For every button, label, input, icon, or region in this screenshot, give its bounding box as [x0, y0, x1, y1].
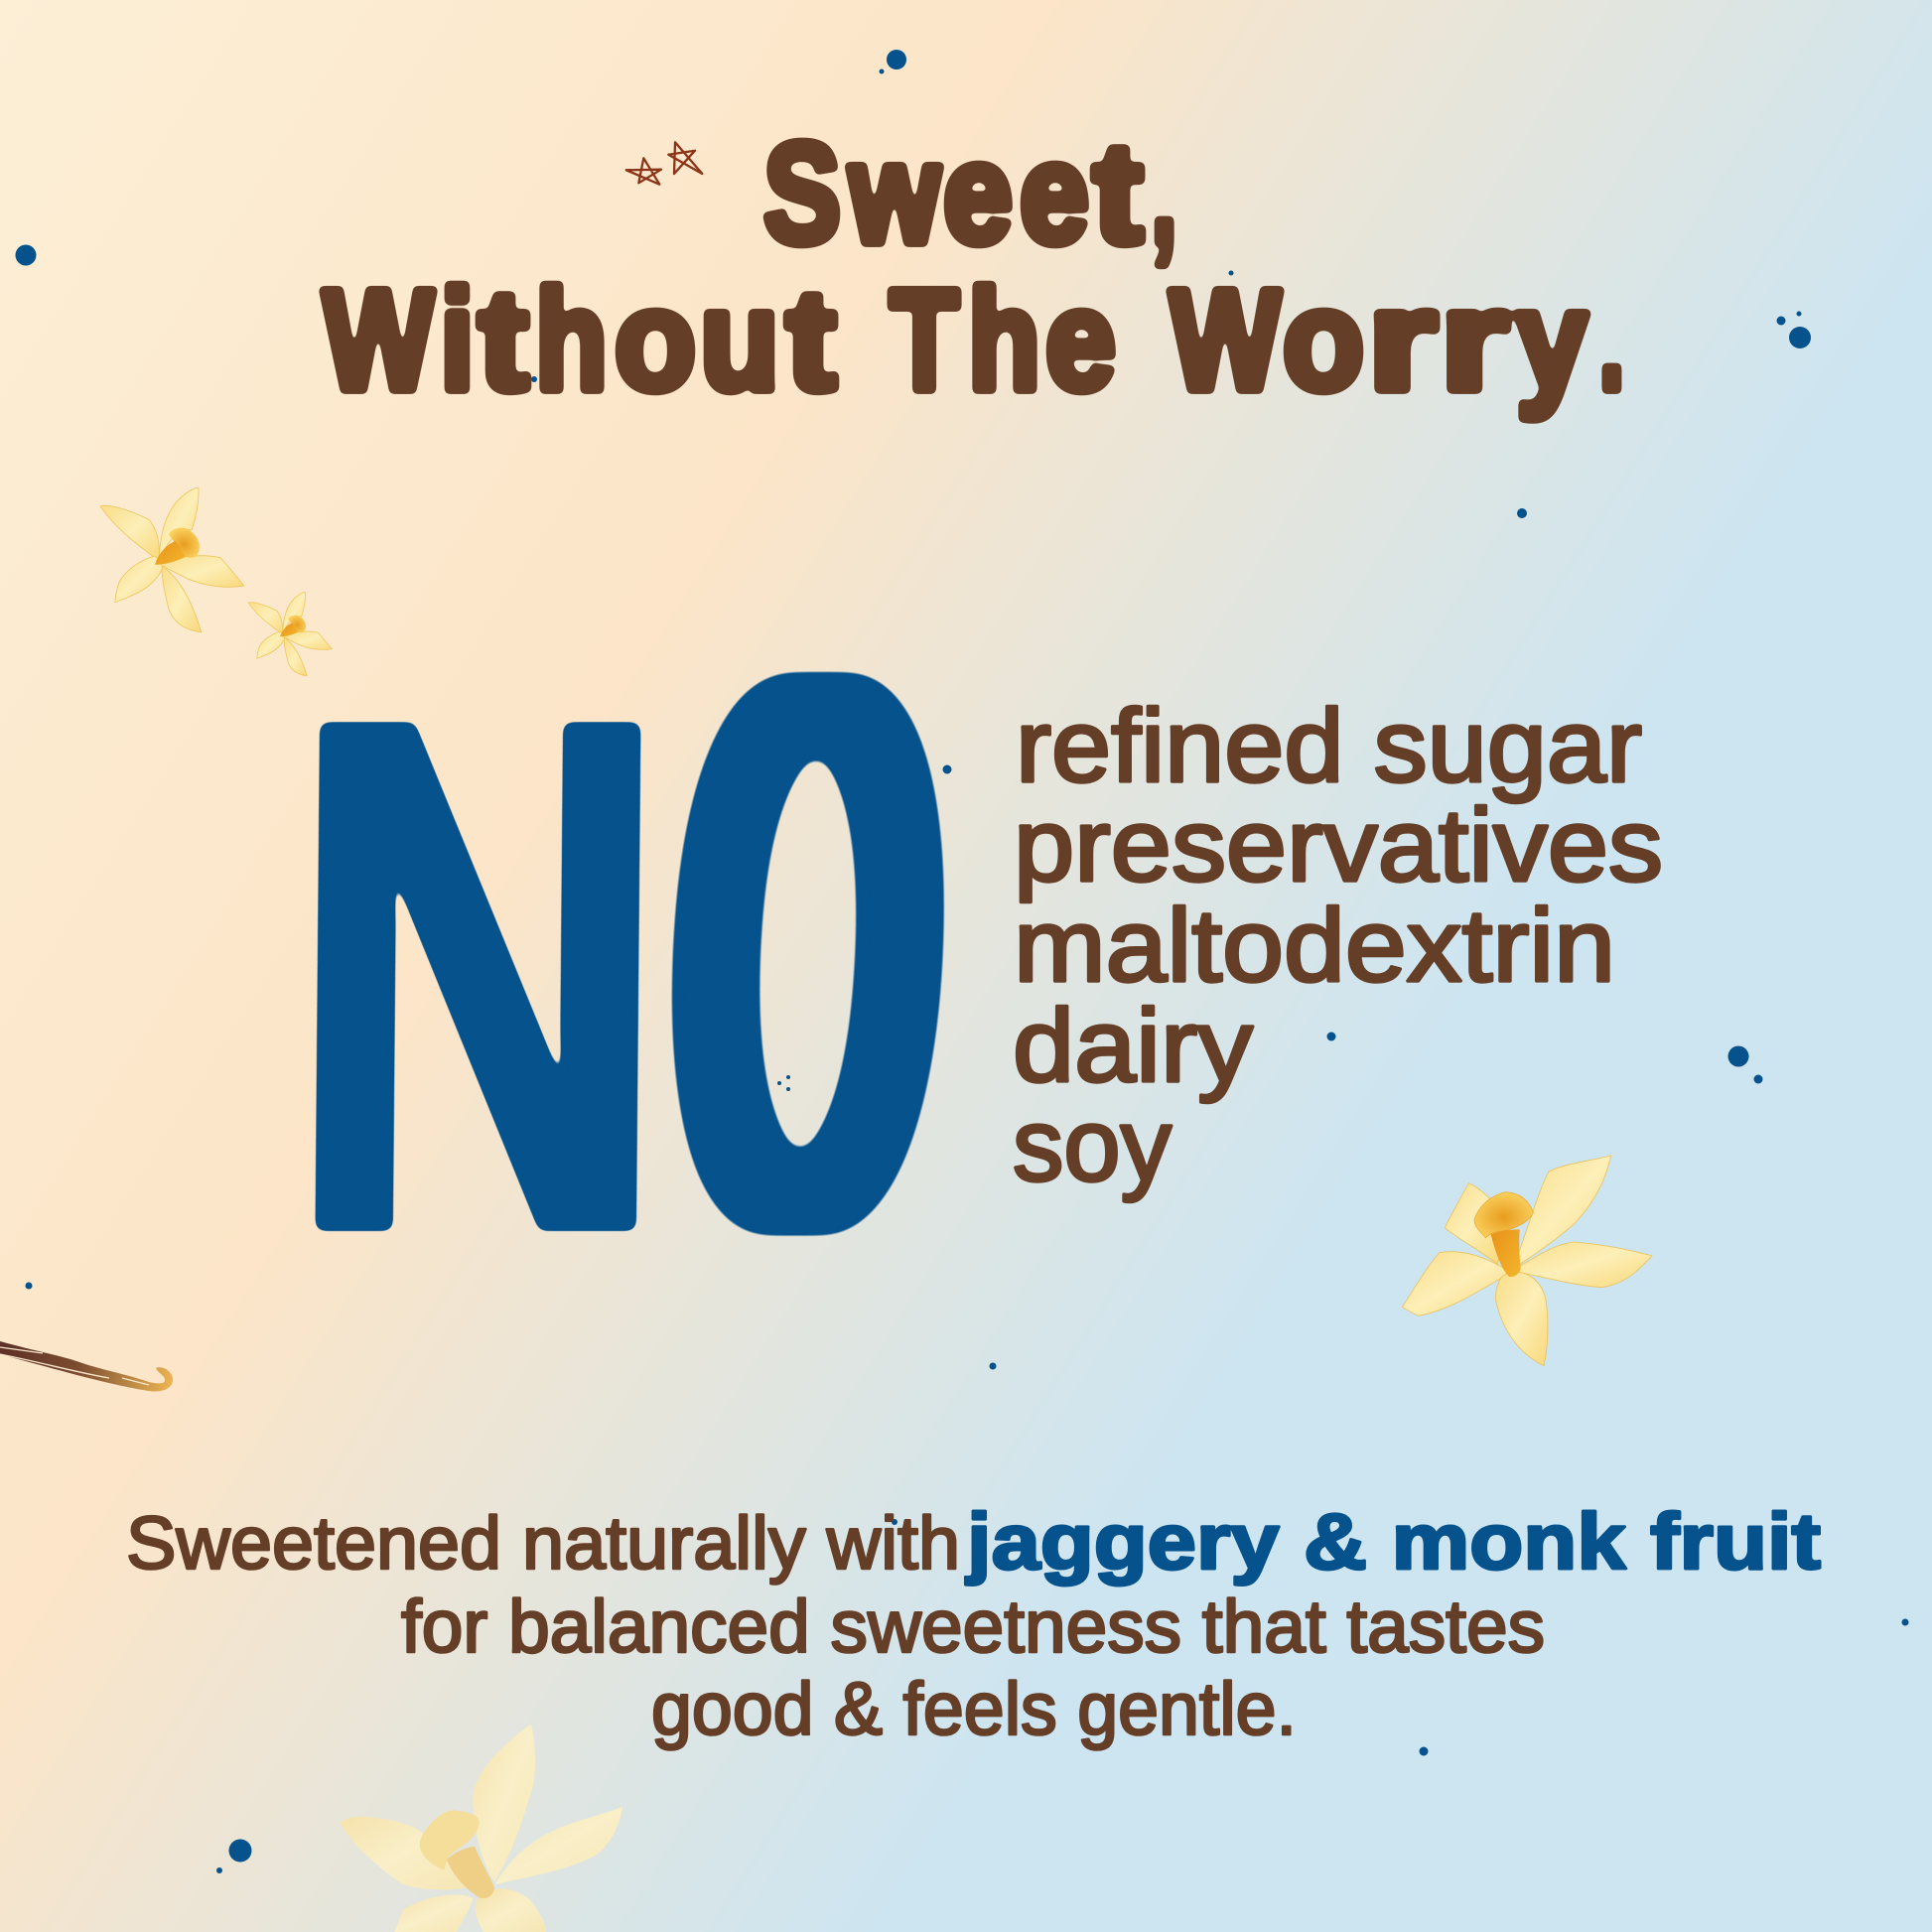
title: line 2: T: [890, 260, 959, 420]
title: line 2: W: [323, 260, 434, 420]
title: line 2: u: [700, 260, 779, 420]
statement line 2: for balanced sweetness that tastes: [401, 1585, 1545, 1668]
list item: maltodextrin: [1014, 889, 1615, 1004]
title: line 2: r: [1441, 260, 1508, 420]
list item: soy: [1013, 1088, 1172, 1203]
statement line 3: good & feels gentle.: [651, 1667, 1297, 1750]
title: line 2: t: [786, 260, 836, 420]
icon: small vanilla flower, small of pair: [248, 592, 332, 676]
title: line 1: e: [1020, 113, 1089, 273]
title: line 1: e: [943, 113, 1013, 273]
letter O: O: [668, 517, 948, 1388]
title: line 2: r: [1368, 260, 1437, 420]
statement line 1: [126, 1497, 1821, 1586]
list of excluded ingredients: [1013, 689, 1663, 1203]
icon: large vanilla flower: [1402, 1156, 1652, 1366]
icon: hand-drawn stars: [626, 142, 702, 185]
big NO wordmark: [284, 517, 948, 1388]
list item: dairy: [1013, 989, 1253, 1104]
title: line 1: t: [1093, 113, 1143, 273]
list item: refined sugar: [1016, 689, 1642, 804]
title: line 2: o: [1283, 260, 1364, 420]
highlighted ingredients: jaggery & monk fruit: [965, 1497, 1821, 1586]
icon: vanilla bean pod: [0, 1341, 173, 1392]
list item: preservatives: [1014, 788, 1663, 903]
title: line 2: h: [535, 260, 608, 420]
title: line 1: ,: [1151, 113, 1177, 273]
icon: faded vanilla flower: [341, 1725, 622, 1932]
title: line 2: y: [1516, 260, 1587, 420]
closing statement: [126, 1497, 1821, 1750]
title: line 2: .: [1598, 260, 1625, 420]
title: line 1: S: [763, 113, 841, 273]
title: line 1: w: [848, 113, 941, 273]
title: line 2: h: [968, 260, 1040, 420]
title: line 2: i: [440, 260, 475, 420]
title: line 2: W: [1170, 260, 1281, 420]
letter N: N: [284, 573, 673, 1377]
title: line 2: t: [479, 260, 528, 420]
plain text: Sweetened naturally with: [126, 1501, 960, 1585]
title: line 2: e: [1045, 260, 1116, 420]
icon: small vanilla flower, large of pair: [100, 488, 244, 632]
title: line 2: o: [615, 260, 696, 420]
